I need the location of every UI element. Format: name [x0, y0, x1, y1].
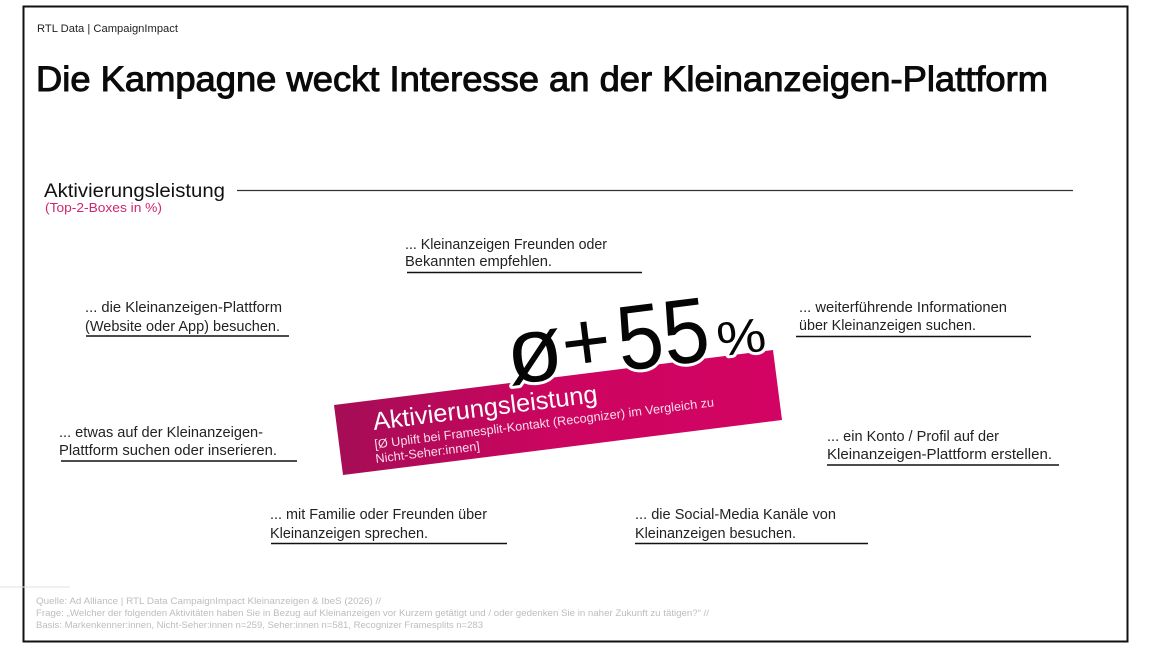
big number: % [714, 309, 769, 367]
brand line: RTL Data | CampaignImpact [37, 23, 178, 35]
callout banner [334, 278, 782, 475]
activity: mit Familie sprechen: Kleinanzeigen sprechen. [270, 526, 428, 542]
banner heading: Aktivierungsleistung [371, 380, 599, 436]
section heading: Aktivierungsleistung: Aktivierungsleistung [44, 181, 225, 202]
activity: Social-Media besuchen: ... die Social-Media Kanäle von [635, 507, 836, 523]
activity: Social-Media besuchen [635, 507, 868, 544]
activity: Informationen suchen: ... weiterführende Informationen [799, 300, 1007, 316]
banner description: Nicht-Seher:innen] [375, 439, 481, 466]
big number [500, 278, 769, 404]
big number: 55 [611, 278, 715, 391]
activity: mit Familie sprechen [270, 507, 507, 544]
big number: + [556, 292, 616, 391]
activity: Informationen suchen: über Kleinanzeigen suchen. [799, 318, 976, 334]
activity: empfehlen [405, 237, 642, 272]
activity: suchen oder inserieren [59, 425, 297, 461]
activity: suchen oder inserieren: ... etwas auf der Kleinanzeigen- [59, 425, 263, 441]
activity: Plattform besuchen [85, 300, 289, 336]
activity: empfehlen: ... Kleinanzeigen Freunden oder [405, 237, 607, 253]
footnote [36, 596, 709, 631]
section heading: Aktivierungsleistung: (Top-2-Boxes in %) [45, 200, 162, 215]
footnote: Frage: „Welcher der folgenden Aktivitäten haben Sie in Bezug auf Kleinanzeigen vor Kurzem getätigt und / oder gedenken Sie in naher Zukunft zu tätigen?“ // [36, 608, 709, 619]
activity: mit Familie sprechen: ... mit Familie oder Freunden über [270, 507, 487, 523]
activity: Informationen suchen [796, 300, 1031, 336]
activity: Konto erstellen: ... ein Konto / Profil auf der [827, 429, 999, 445]
activity: suchen oder inserieren: Plattform suchen oder inserieren. [59, 443, 277, 459]
section heading: Aktivierungsleistung [44, 181, 1073, 215]
banner description: [Ø Uplift bei Framesplit-Kontakt (Recognizer) im Vergleich zu [374, 395, 715, 451]
activity: Plattform besuchen: (Website oder App) besuchen. [85, 319, 280, 335]
footnote: Basis: Markenkenner:innen, Nicht-Seher:innen n=259, Seher:innen n=581, Recognizer Framesplits n=283 [36, 620, 483, 631]
activity: Konto erstellen [827, 429, 1059, 465]
footnote: Quelle: Ad Alliance | RTL Data CampaignImpact Kleinanzeigen & IbeS (2026) // [36, 596, 381, 607]
title: Die Kampagne weckt Interesse an der Kleinanzeigen-Plattform [36, 60, 1048, 99]
activity: Konto erstellen: Kleinanzeigen-Plattform erstellen. [827, 447, 1052, 463]
banner shape [334, 350, 782, 475]
activity: Social-Media besuchen: Kleinanzeigen besuchen. [635, 526, 796, 542]
big number: ø [500, 296, 568, 404]
activity: empfehlen: Bekannten empfehlen. [405, 254, 552, 270]
activity: Plattform besuchen: ... die Kleinanzeigen-Plattform [85, 300, 282, 316]
